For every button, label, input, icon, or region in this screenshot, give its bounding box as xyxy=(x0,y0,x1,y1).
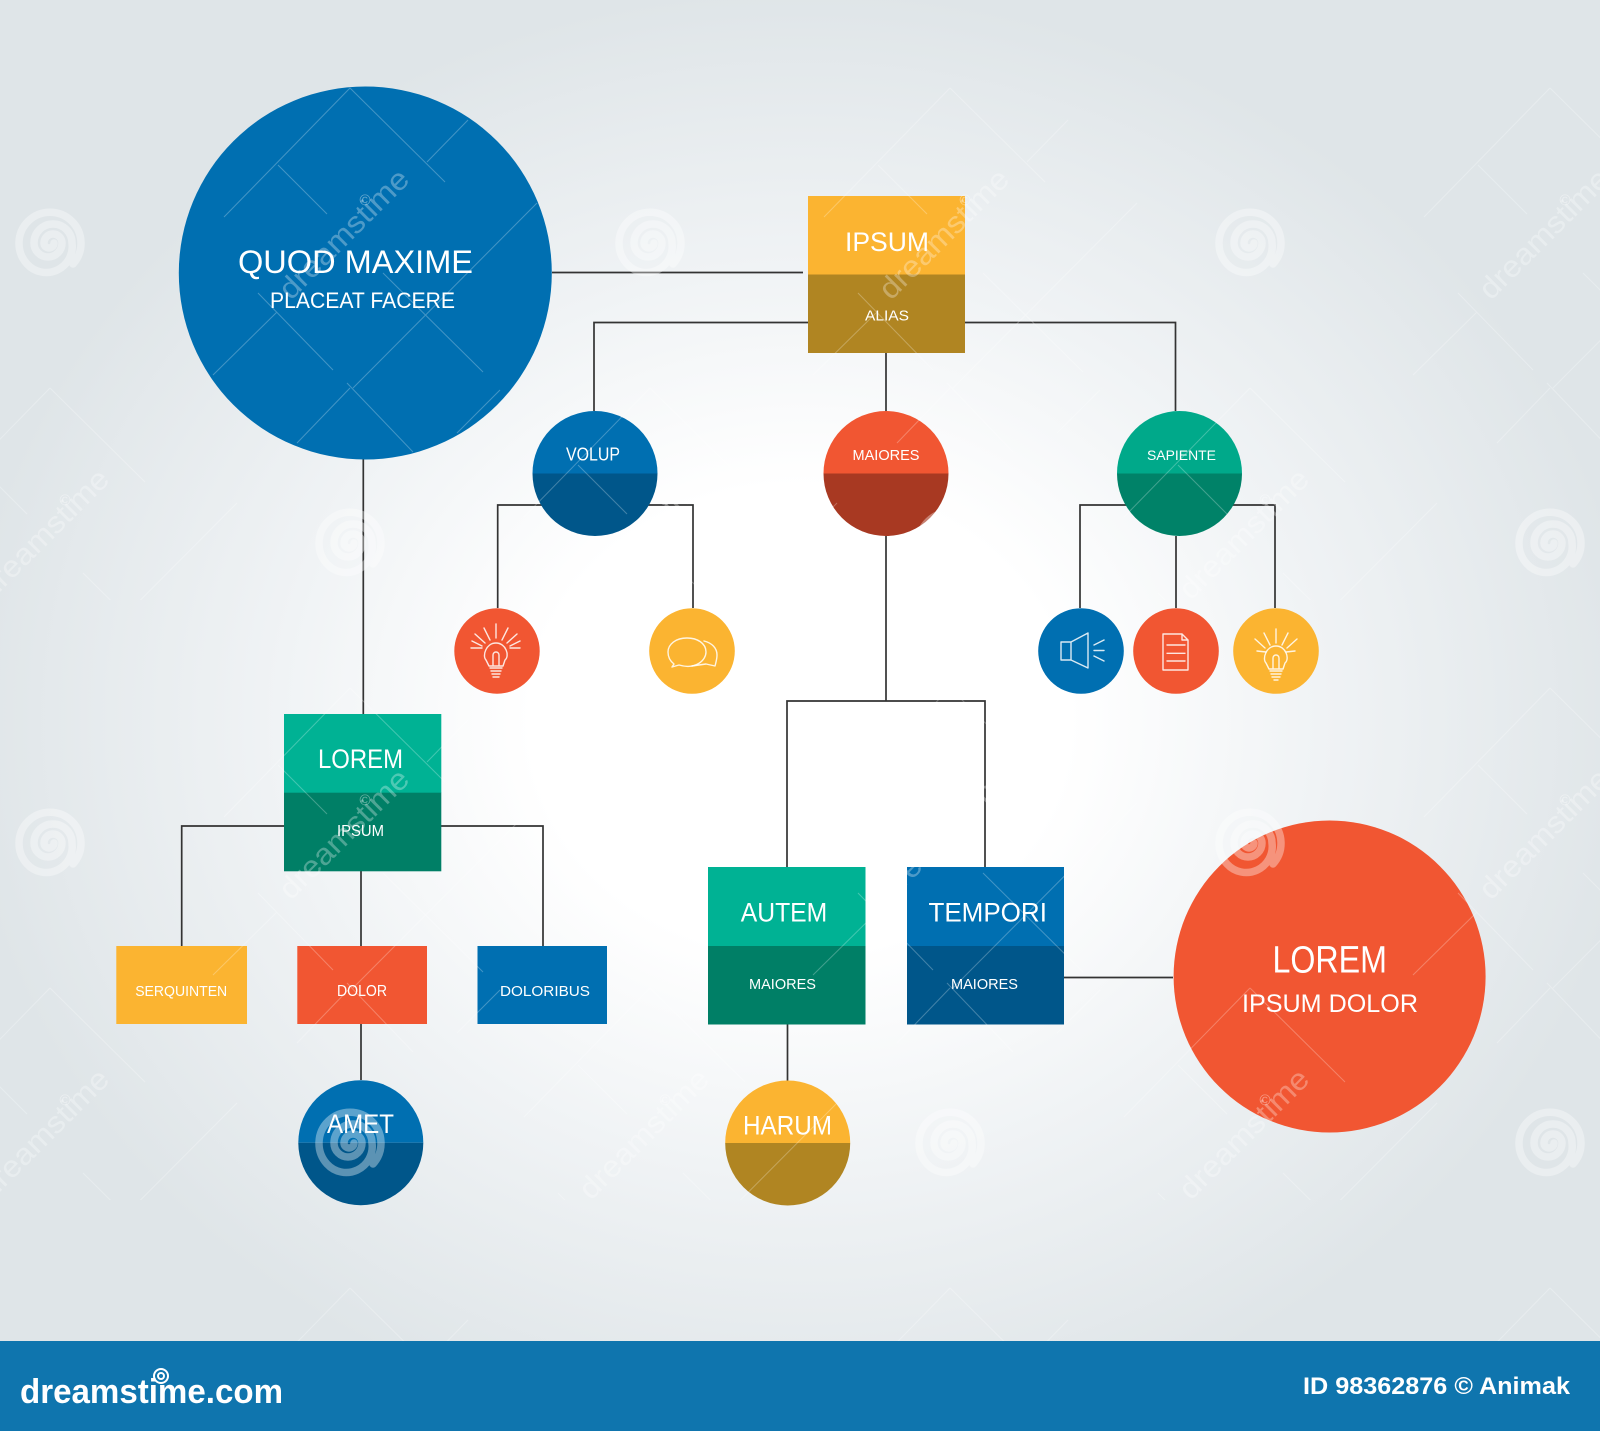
watermark: dreamstime text: © xyxy=(959,792,971,809)
label: alias: ALIAS xyxy=(865,308,909,324)
box: lorem ipsum xyxy=(284,714,441,871)
label: maiores: MAIORES xyxy=(951,976,1018,993)
watermark: dreamstime text: © xyxy=(359,192,371,209)
label: autem: AUTEM xyxy=(741,898,827,928)
label: amet: AMET xyxy=(327,1109,394,1139)
footer bar xyxy=(0,1341,1600,1431)
watermark: dreamstime text: dreamstime xyxy=(573,463,716,606)
watermark: dreamstime text: © xyxy=(959,192,971,209)
label: maiores: MAIORES xyxy=(749,976,816,993)
circle: sapiente xyxy=(1117,411,1242,536)
watermark: dreamstime text: dreamstime xyxy=(1173,1063,1316,1206)
label: maiores: MAIORES xyxy=(852,447,920,464)
connector lines xyxy=(182,272,1275,1081)
label: sapiente: SAPIENTE xyxy=(1147,447,1216,463)
watermark: dreamstime text: dreamstime xyxy=(873,763,1016,906)
circle: lorem ipsum dolor xyxy=(1174,820,1486,1132)
box: autem maiores xyxy=(708,867,866,1024)
box: dolor xyxy=(297,946,427,1024)
watermark: spirals xyxy=(19,212,1581,1173)
heading: quod maxime: QUOD MAXIME xyxy=(238,244,473,280)
watermark: dreamstime text: dreamstime xyxy=(1173,463,1316,606)
label: harum: HARUM xyxy=(743,1111,832,1141)
label: ipsum: IPSUM xyxy=(337,823,384,840)
watermark: dreamstime text: © xyxy=(1259,1092,1271,1109)
box: doloribus xyxy=(478,946,607,1024)
watermark: dreamstime text: dreamstime xyxy=(573,1063,716,1206)
label: dolor: DOLOR xyxy=(337,983,387,1000)
heading: lorem: LOREM xyxy=(1272,940,1387,982)
watermark: dreamstime text: © xyxy=(59,1092,71,1109)
subheading: placeat facere: PLACEAT FACERE xyxy=(270,288,455,313)
watermark: dreamstime text: © xyxy=(1559,192,1571,209)
icon: light bulb on yellow circle xyxy=(1233,608,1319,694)
footer logo: dreamstime.com: dreamstime.com xyxy=(20,1373,283,1411)
watermark: dreamstime text: dreamstime xyxy=(873,163,1016,306)
icon: logo spiral xyxy=(154,1369,168,1383)
watermark: dreamstime text: © xyxy=(659,1092,671,1109)
watermark: dreamstime text: © xyxy=(59,492,71,509)
icon: document on red circle xyxy=(1133,608,1219,694)
circle: maiores xyxy=(824,411,948,536)
label: tempori: TEMPORI xyxy=(928,898,1047,928)
watermark: dreamstime text: © xyxy=(359,792,371,809)
icon: speech bubbles on yellow circle xyxy=(649,608,735,694)
footer credit: ID 98362876 © Animak xyxy=(1303,1373,1571,1400)
watermark: dreamstime text: © xyxy=(1259,492,1271,509)
box: tempori maiores xyxy=(907,867,1064,1024)
label: ipsum: IPSUM xyxy=(845,227,929,257)
circle: volup xyxy=(532,411,658,536)
icon: light bulb on red circle xyxy=(454,608,540,694)
label: doloribus: DOLORIBUS xyxy=(500,983,590,1000)
icon: megaphone on blue circle xyxy=(1038,608,1124,694)
watermark: dreamstime text: © xyxy=(659,492,671,509)
label: volup: VOLUP xyxy=(566,445,620,465)
watermark: dreamstime text: dreamstime xyxy=(273,163,416,306)
box: serquinten xyxy=(116,946,247,1024)
label: lorem: LOREM xyxy=(318,744,403,774)
circle: amet xyxy=(298,1080,423,1205)
watermark: dreamstime text: dreamstime xyxy=(273,763,416,906)
label: serquinten: SERQUINTEN xyxy=(135,983,227,1000)
watermark: dreamstime text xyxy=(0,163,1600,1206)
subheading: ipsum dolor: IPSUM DOLOR xyxy=(1242,990,1418,1018)
circle: harum xyxy=(725,1080,850,1206)
main circle: quod maxime xyxy=(179,86,552,460)
watermark: dreamstime text: © xyxy=(1559,792,1571,809)
box: ipsum alias xyxy=(808,196,965,353)
